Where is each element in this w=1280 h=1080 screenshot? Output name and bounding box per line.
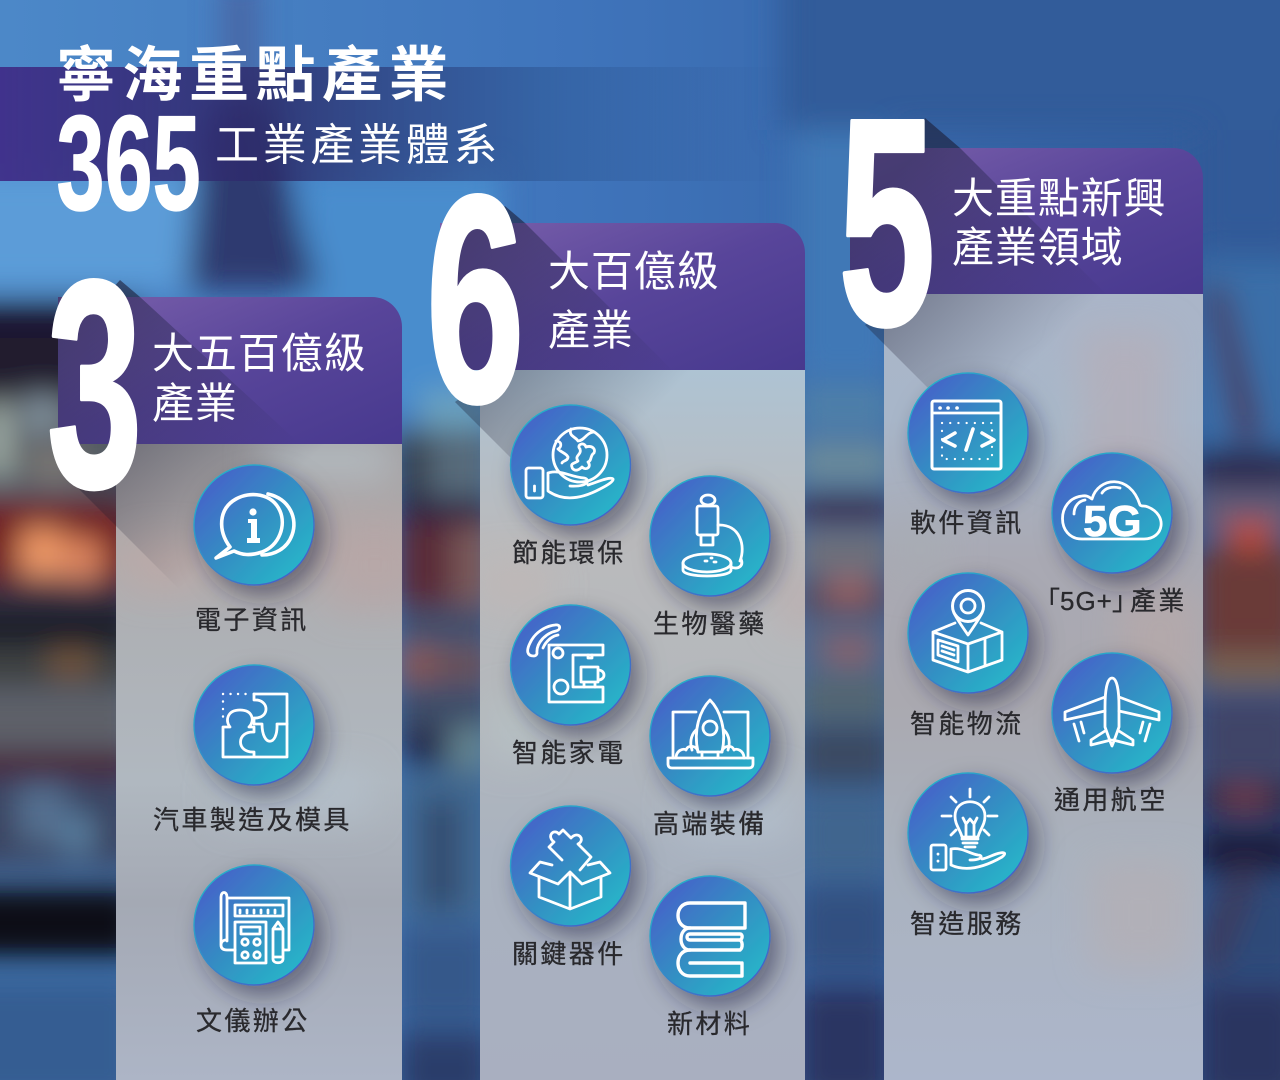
item: 5G+ 產業: 5G (1083, 497, 1142, 546)
item: 生物醫藥: 生物醫藥 (653, 609, 767, 639)
item: 5G+ 產業: 「 (1034, 586, 1062, 616)
numeral 3: 3 (47, 221, 142, 550)
item: 5G+ 產業 (1034, 453, 1187, 616)
digit long shadow (443, 223, 672, 370)
item: 5G+ 產業: 產業 (1130, 586, 1187, 616)
panel body (480, 370, 820, 1080)
item: 電子資訊: 電子資訊 (195, 605, 309, 635)
item: 高端裝備: 高端裝備 (653, 809, 767, 839)
item: 文儀辦公: 文儀辦公 (196, 1006, 310, 1036)
numeral 5: 5 (838, 58, 935, 387)
heading: 大五百億級 (152, 330, 367, 377)
panel: 6 百億級產業 (431, 193, 805, 1080)
item: 智造服務 (908, 773, 1028, 939)
item: 通用航空: 通用航空 (1054, 785, 1168, 815)
item: 高端裝備 (650, 676, 770, 839)
item: 關鍵器件 (510, 806, 630, 969)
digit long shadow (850, 148, 1106, 294)
heading (952, 175, 1167, 271)
item: 智造服務: 智造服務 (910, 909, 1024, 939)
heading (548, 248, 720, 354)
main title: 寧海重點產業 (56, 42, 455, 109)
item: 智能家電: 智能家電 (512, 738, 626, 768)
heading: 產業領域 (952, 224, 1124, 271)
item: 新材料 (650, 876, 770, 1039)
heading: 產業 (548, 307, 634, 354)
heading: 大百億級 (548, 248, 720, 295)
item: 5G+ 產業: 5G+ (1060, 586, 1113, 616)
header bar (58, 297, 402, 444)
item: 5G+ 產業: 」 (1112, 586, 1140, 616)
item: 軟件資訊 (908, 373, 1028, 538)
header bar (440, 223, 805, 370)
title band (0, 67, 790, 181)
panel: 3 五百億級產業 (50, 278, 402, 1080)
heading: 大重點新興 (952, 175, 1167, 222)
channel 402-480 (395, 428, 495, 504)
digit wedge shadow (865, 282, 1190, 448)
item: 汽車製造及模具 (153, 665, 352, 835)
item: 文儀辦公 (194, 865, 314, 1036)
heading: 產業 (152, 380, 238, 427)
number 365: 365 (56, 88, 201, 239)
item: 通用航空 (1052, 653, 1172, 815)
item: 汽車製造及模具: 汽車製造及模具 (153, 805, 352, 835)
header bar (850, 148, 1203, 294)
subtitle: 工業產業體系 (215, 121, 501, 170)
item: 生物醫藥 (650, 476, 770, 639)
item: 智能家電 (510, 605, 630, 768)
channel 805-884 (780, 0, 1280, 130)
heading (152, 330, 367, 427)
digit wedge shadow (77, 444, 402, 610)
item: 軟件資訊: 軟件資訊 (910, 508, 1024, 538)
panel: 5 重點新興產業領域 (838, 58, 1203, 1080)
digit long shadow (58, 297, 300, 444)
item: 電子資訊 (194, 465, 314, 635)
item: 節能環保 (510, 405, 630, 568)
left strip (0, 300, 140, 340)
item: 關鍵器件: 關鍵器件 (512, 939, 626, 969)
item: 新材料: 新材料 (667, 1009, 752, 1039)
item: 節能環保: 節能環保 (512, 538, 626, 568)
item: 智能物流: 智能物流 (910, 709, 1024, 739)
item: 智能物流 (908, 573, 1028, 739)
numeral 6: 6 (426, 134, 524, 464)
title (56, 42, 501, 239)
digit wedge shadow (455, 359, 780, 525)
panel body (884, 294, 1203, 1080)
right strip (1262, 165, 1280, 195)
panel body (116, 440, 420, 1080)
